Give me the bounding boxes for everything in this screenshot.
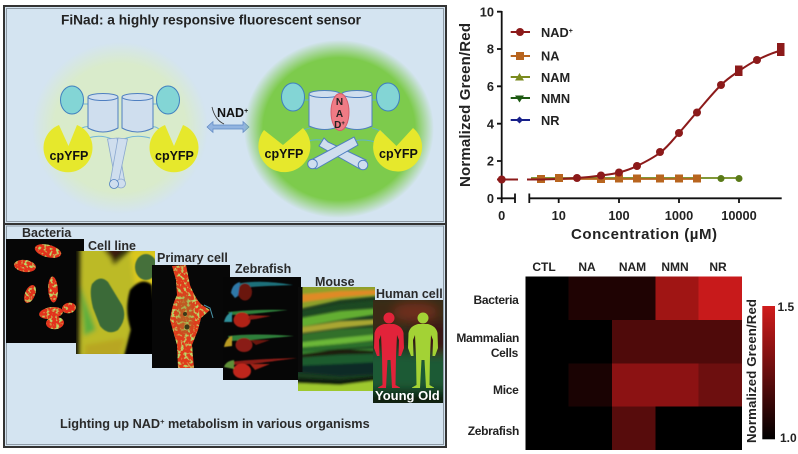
row labels: Mice xyxy=(493,383,519,397)
axes xyxy=(497,11,782,203)
x tick labels xyxy=(498,208,757,223)
label: Human cell: Human cell xyxy=(376,287,443,301)
column labels: NR xyxy=(709,260,727,274)
x tick labels: 10000 xyxy=(721,208,757,223)
image: cell line xyxy=(76,251,155,354)
icon: cpYFP left: cpYFP xyxy=(50,149,88,163)
series: NA overlay xyxy=(555,174,563,182)
y axis title: Normalized Green/Red xyxy=(457,23,474,187)
x tick labels: 1000 xyxy=(665,208,693,223)
row labels: Cells xyxy=(491,346,519,360)
caption: Lighting up NAD xyxy=(60,417,160,431)
icon: fish 1 xyxy=(231,282,293,300)
row labels xyxy=(456,293,519,438)
heatmap cells xyxy=(525,277,742,450)
y tick labels: 10 xyxy=(480,4,494,20)
row labels: Bacteria xyxy=(474,293,519,307)
icon: cpYFP right xyxy=(373,128,422,172)
chart: dose response xyxy=(457,4,784,243)
column labels: NAM xyxy=(619,260,646,274)
icon: cpYFP left xyxy=(44,125,93,172)
image: zebrafish xyxy=(223,277,301,380)
image: human cell xyxy=(373,300,443,403)
icon: fish 3 xyxy=(224,334,294,352)
icon: NAD+ binding site: N xyxy=(336,97,343,108)
label: Bacteria: Bacteria xyxy=(22,226,72,240)
legend: NAM: NAM xyxy=(541,70,570,85)
icon: old figure xyxy=(408,312,438,388)
icon: cpYFP left xyxy=(258,128,310,172)
arrow: NAD+ exchange xyxy=(207,106,249,132)
icon: rods xyxy=(108,138,128,188)
x tick labels: 10 xyxy=(552,208,566,223)
column labels: CTL xyxy=(532,260,556,274)
icon: fish 4 xyxy=(224,358,297,378)
icon: teal domains xyxy=(60,86,180,114)
icon: cpYFP right: cpYFP xyxy=(155,149,194,163)
colour bar title: Normalized Green/Red xyxy=(744,299,759,443)
label: Zebrafish: Zebrafish xyxy=(235,262,291,276)
x axis title: Concentration (µM) xyxy=(571,226,717,243)
colour bar xyxy=(762,300,797,445)
column labels: NA xyxy=(578,260,596,274)
legend: NAD+: + xyxy=(569,28,573,35)
y tick labels: 6 xyxy=(487,79,494,94)
sensor without NAD+ xyxy=(32,42,208,214)
title: FiNad: a highly responsive fluorescent sensor xyxy=(61,12,362,28)
label: Mouse: Mouse xyxy=(315,275,355,289)
colour bar: 1.0 xyxy=(780,431,797,445)
series: NAD+ xyxy=(497,43,784,184)
panel: organisms xyxy=(4,224,450,447)
legend: NAD+: NAD xyxy=(541,25,569,40)
series: NA xyxy=(531,174,701,183)
y tick labels: 8 xyxy=(487,42,494,57)
x tick labels: 100 xyxy=(608,208,630,223)
sensor with NAD+ xyxy=(244,40,434,218)
image: primary cell xyxy=(152,265,230,368)
icon: teal domains xyxy=(282,83,400,111)
image: mouse tissue xyxy=(298,287,375,391)
label: Cell line: Cell line xyxy=(88,239,136,253)
label: Primary cell: Primary cell xyxy=(157,251,228,265)
y tick labels: 4 xyxy=(487,116,495,131)
arrow: NAD+ exchange: NAD xyxy=(217,106,244,120)
arrow: NAD+ exchange: + xyxy=(244,108,248,115)
legend: NR: NR xyxy=(541,113,559,128)
y tick labels xyxy=(480,4,495,206)
x tick labels: 0 xyxy=(498,208,505,223)
icon: cpYFP right xyxy=(149,125,198,172)
icon: crossed rods xyxy=(308,137,368,170)
icon: cpYFP right: cpYFP xyxy=(379,147,418,161)
icon: young figure xyxy=(374,312,404,388)
icon: NAD+ binding site: A xyxy=(336,109,343,120)
colour bar: 1.5 xyxy=(778,300,795,314)
column labels xyxy=(532,260,727,274)
icon: fish 2 xyxy=(224,310,288,328)
y tick labels: 2 xyxy=(487,154,494,169)
row labels: Zebrafish xyxy=(468,424,519,438)
icon: NAD+ binding site: + xyxy=(341,121,345,127)
legend: NA: NA xyxy=(541,48,559,64)
icon: cpYFP left: cpYFP xyxy=(264,147,303,161)
row labels: Mammalian xyxy=(456,331,519,345)
legend: NMN: NMN xyxy=(541,91,570,106)
legend: NAD+ xyxy=(511,25,573,40)
panel: sensor diagram xyxy=(4,6,446,224)
image: bacteria xyxy=(6,239,84,343)
caption: metabolism in various organisms xyxy=(164,417,370,431)
icon: NAD+ binding site xyxy=(331,94,349,131)
icon: NAD+ binding site: D xyxy=(334,120,341,131)
legend xyxy=(511,25,573,128)
caption: + xyxy=(160,417,165,426)
label: Young Old: Young Old xyxy=(375,388,440,403)
y tick labels: 0 xyxy=(487,191,494,206)
heatmap xyxy=(456,260,797,450)
series: NMN and NR tail xyxy=(531,175,742,182)
column labels: NMN xyxy=(661,260,689,274)
